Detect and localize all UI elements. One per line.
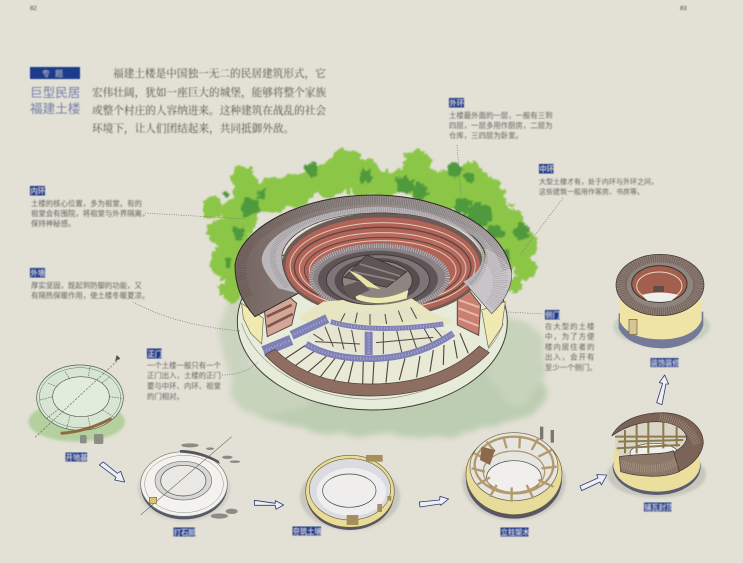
callout: middle ring: 这些建筑一般用作客房、书房等。 <box>539 187 644 196</box>
earth wall <box>306 455 394 527</box>
section tag <box>30 67 80 79</box>
callout: side gate: 侧门 <box>546 310 560 320</box>
stone footing shadow <box>138 456 230 521</box>
arrow 2 <box>254 500 284 509</box>
heading: 巨型民居 <box>30 86 80 100</box>
callout: middle ring: 中环 <box>540 164 554 174</box>
callout: main gate: 的门相对。 <box>147 392 184 401</box>
timber frame <box>472 436 557 502</box>
arrow 1 <box>99 462 125 482</box>
callout: main gate <box>147 348 222 401</box>
middle room row <box>307 320 450 355</box>
earth wall <box>613 443 700 492</box>
step 5: roofing <box>607 413 706 498</box>
callout: outer wall: 有隔热保暖作用，使土楼冬暖夏凉。 <box>31 291 149 300</box>
inner room row <box>335 305 423 323</box>
label: foundation: 开地基 <box>66 453 87 462</box>
interior floor <box>309 459 391 520</box>
yellow earth wall cut left <box>242 303 263 344</box>
site plan circle <box>37 365 123 430</box>
callout: main gate: 正门 <box>148 350 162 358</box>
label: rammed wall: 夯筑土墙 <box>293 527 322 536</box>
door <box>629 319 637 335</box>
callout: inner ring <box>30 186 149 228</box>
page number right: 83 <box>680 6 687 12</box>
label: stone footing: 打石脚 <box>174 528 195 537</box>
inner courtyard <box>632 266 687 302</box>
tree foliage dark <box>222 162 530 266</box>
inner cut-away rooms right <box>457 289 481 335</box>
wall shadow <box>300 463 400 530</box>
rock piles <box>180 443 240 519</box>
page number left: 82 <box>30 6 37 12</box>
room dividers <box>283 307 468 384</box>
thatched roof <box>616 254 704 316</box>
right roof light band <box>468 248 512 313</box>
wall shadow <box>607 452 706 498</box>
brick tiers inside courtyard <box>282 212 483 318</box>
callout: side gate: 中，为了方便 <box>545 332 595 341</box>
callout: main gate: 一个土楼一般只有一个 <box>147 361 222 370</box>
axis line <box>141 437 232 515</box>
label: posts: 立柱架木 <box>501 528 530 537</box>
earth wall <box>466 433 562 515</box>
stone base <box>306 458 394 530</box>
callout: outer wall <box>30 268 149 300</box>
intro paragraph: 福建土楼是中国独一无二的民居建筑形式，它 <box>113 67 326 80</box>
callout: outer wall: 外墙 <box>30 268 45 278</box>
stone base <box>619 312 703 348</box>
callout: outer ring: 四层，一层多用作厨房，二层为 <box>449 121 552 130</box>
heading <box>30 86 81 116</box>
callout: middle ring <box>539 164 658 196</box>
callout: side gate: 至少一个侧门。 <box>545 363 597 372</box>
stone base <box>466 440 562 519</box>
callout: side gate: 出入，会开有 <box>545 352 595 362</box>
step 3: rammed earth wall <box>300 455 400 530</box>
ground wash under main building <box>220 290 550 437</box>
corner gate <box>149 497 157 503</box>
leader lines <box>133 145 563 375</box>
step 4: posts and beams <box>462 427 566 520</box>
step 2: stone footing <box>138 437 240 521</box>
heading: 福建土楼 <box>30 102 81 116</box>
callout: side gate: 楼内居住者的 <box>545 342 595 352</box>
workers and scaffolds <box>347 455 391 525</box>
step 6: finished tulou <box>613 254 710 348</box>
label: roofing: 铺瓦封顶 <box>644 503 673 512</box>
main roof ring <box>235 195 512 317</box>
callout: middle ring: 大型土楼才有，处于内环与外环之间， <box>539 177 658 186</box>
timber stair and scaffolds <box>480 427 554 465</box>
brown trench arc <box>61 418 112 433</box>
tree foliage light <box>201 149 538 303</box>
inner cut-away rooms left <box>264 292 297 337</box>
inner roof rings <box>309 244 450 311</box>
callout: outer ring: 土楼最外面的一层，一般有三到 <box>449 111 552 120</box>
callout: inner ring: 内环 <box>30 186 45 196</box>
intro paragraph <box>92 67 326 135</box>
pebble courtyard paths <box>263 319 453 359</box>
front wall section <box>265 346 489 396</box>
callout: side gate <box>545 310 597 372</box>
arrow 4 <box>580 475 607 491</box>
wall shadow <box>462 443 566 520</box>
callout: inner ring: 土楼的核心位置，多为祖堂。有的 <box>31 199 142 208</box>
arrow 3 <box>419 496 449 507</box>
trees behind building <box>201 149 538 303</box>
outer front room row <box>275 330 479 383</box>
timber frame <box>615 422 687 453</box>
main tulou cutaway <box>235 195 512 410</box>
intro paragraph: 环境下，让人们团结起来，共同抵御外敌。 <box>92 122 294 135</box>
stone base <box>613 438 701 495</box>
green ground wash <box>28 402 125 442</box>
yellow earth wall cut right <box>482 302 505 347</box>
ancestral hall <box>342 255 407 298</box>
callout: outer wall: 厚实坚固，既起到防御的功能，又 <box>31 281 142 290</box>
ground shadow <box>613 307 710 347</box>
earth wall <box>620 300 702 339</box>
stone base <box>141 454 227 519</box>
base platform <box>237 233 507 410</box>
callout: outer ring: 外环 <box>450 98 464 108</box>
courtyard floor yellow <box>297 298 453 333</box>
interior <box>615 415 698 472</box>
callout: side gate: 在大型的土楼 <box>545 322 595 331</box>
intro paragraph: 或整个村庄的人容纳进来。这种建筑在战乱的社会 <box>92 104 326 117</box>
section tag: 专题 <box>42 68 68 78</box>
roof tile hatching <box>242 200 507 307</box>
callout: outer ring: 仓库，三四层为卧室。 <box>449 131 523 140</box>
lighter roof slope <box>262 207 484 293</box>
callout: inner ring: 祖堂会有围院，将祖堂与外界隔离， <box>31 209 149 218</box>
intro paragraph: 宏伟壮阔，犹如一座巨大的城堡，能够将整个家族 <box>92 86 326 99</box>
callout: inner ring: 保持神秘感。 <box>31 219 75 228</box>
arrow 5 <box>657 375 669 405</box>
workers <box>80 434 103 444</box>
step 1: laying out the foundation <box>28 355 125 444</box>
interior floor <box>470 433 558 501</box>
label: finished: 装饰装修 <box>651 358 680 367</box>
thatch roof <box>612 413 703 472</box>
callout: main gate: 要与中环、内环、祖堂 <box>147 382 221 390</box>
callout: main gate: 正门出入，土楼的正门 <box>147 371 221 380</box>
callout: outer ring <box>449 98 552 140</box>
axis line with flag <box>35 358 120 437</box>
